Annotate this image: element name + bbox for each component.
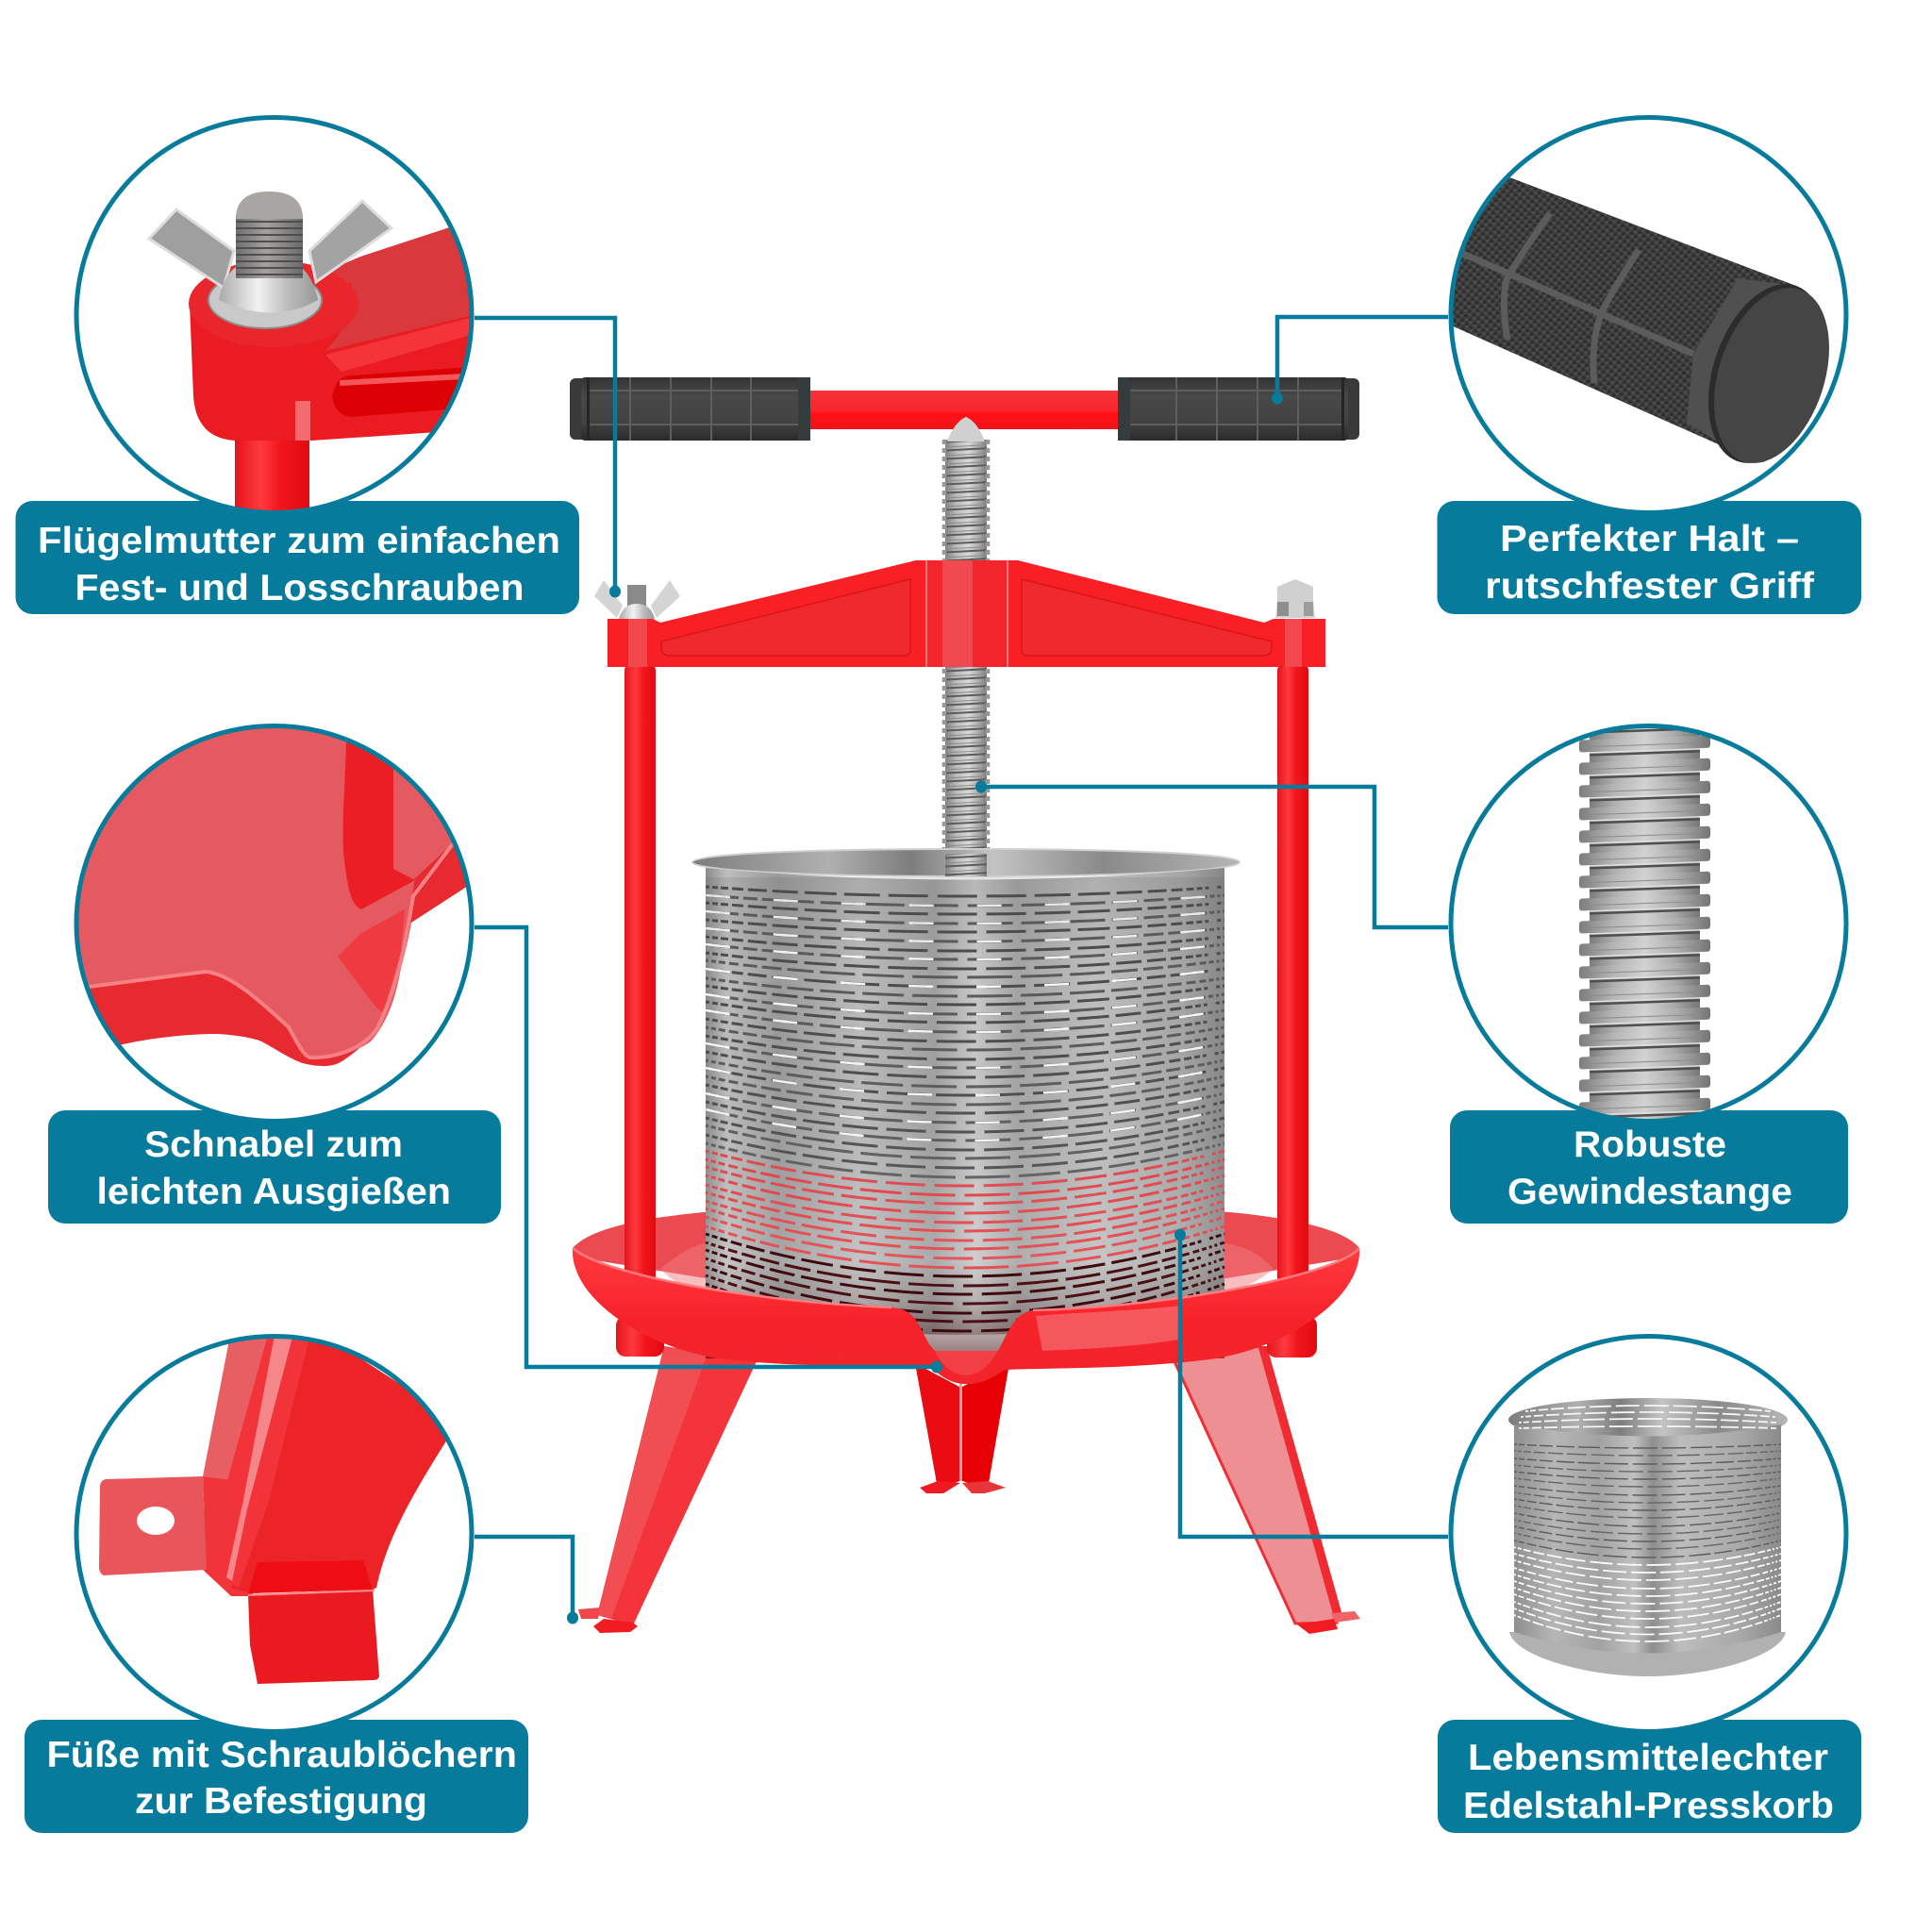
left grip xyxy=(570,377,810,441)
inset circle: wing nut xyxy=(76,117,481,519)
dark block xyxy=(248,1560,373,1593)
wing nut xyxy=(594,580,680,619)
label: threaded rod: Gewindestange xyxy=(1507,1172,1792,1212)
label: basket: Lebensmittelechter xyxy=(1468,1738,1828,1778)
outer wall xyxy=(90,846,466,1066)
label: feet xyxy=(25,1720,528,1833)
mini basket xyxy=(1508,1398,1788,1676)
panel: feet xyxy=(25,1330,528,1833)
screw hole xyxy=(137,1507,175,1535)
connector: threaded rod xyxy=(975,781,1448,927)
end cap xyxy=(1714,288,1829,463)
red post xyxy=(235,440,309,510)
label: threaded rod: Robuste xyxy=(1574,1124,1726,1165)
tray floor sheen xyxy=(660,1243,1274,1294)
highlight xyxy=(295,401,310,441)
left leg xyxy=(578,1346,758,1633)
tray front wall with spout xyxy=(573,1248,1359,1384)
rim highlight xyxy=(573,1248,1359,1310)
label: feet: Füße mit Schraublöchern xyxy=(47,1735,517,1775)
label: spout: leichten Ausgießen xyxy=(96,1172,451,1212)
connector: feet xyxy=(475,1537,578,1624)
label: threaded rod xyxy=(1450,1110,1848,1224)
inset circle: grip xyxy=(1415,117,1850,513)
bright slot flecks xyxy=(706,895,1224,1141)
label: spout: Schnabel zum xyxy=(144,1124,403,1165)
label: wing nut: Flügelmutter zum einfachen xyxy=(38,521,560,561)
label: wing nut xyxy=(15,501,579,614)
bottom flange xyxy=(1509,1632,1786,1676)
right recess xyxy=(1022,579,1272,656)
dark body slots xyxy=(1514,1444,1781,1557)
tray inner surface xyxy=(573,1204,1359,1321)
washer xyxy=(208,283,323,329)
bracket body xyxy=(190,283,481,441)
rim and interior xyxy=(1508,1398,1788,1441)
right grip xyxy=(1118,377,1359,441)
left recess xyxy=(661,579,910,656)
label: spout xyxy=(48,1110,501,1224)
grip ribs xyxy=(1443,213,1693,383)
connector: handle grip xyxy=(1272,317,1448,404)
frame posts xyxy=(625,665,1308,1283)
wall highlights xyxy=(1036,1306,1181,1351)
label: grip: Perfekter Halt – xyxy=(1500,519,1799,559)
textured arm xyxy=(325,227,470,351)
red slots xyxy=(706,1151,1224,1258)
label: grip xyxy=(1438,501,1861,614)
light side band xyxy=(203,1330,269,1479)
tray feet stubs xyxy=(616,1316,1317,1357)
spout floor xyxy=(935,1351,998,1375)
bolt xyxy=(236,215,303,278)
product: fruit press xyxy=(570,377,1360,1634)
upper crossbeam xyxy=(608,560,1325,667)
label: grip: rutschfester Griff xyxy=(1485,566,1815,607)
panel: grip xyxy=(1415,117,1861,614)
connector: spout xyxy=(475,927,942,1374)
tab fold xyxy=(203,1476,238,1594)
threaded rod upper xyxy=(944,417,988,875)
main surface xyxy=(79,728,452,1057)
label: basket: Edelstahl-Presskorb xyxy=(1463,1786,1834,1826)
press basket xyxy=(692,849,1240,1358)
post reflection xyxy=(343,741,415,909)
lower ridge xyxy=(325,318,470,372)
inset circle: basket xyxy=(1451,1336,1846,1732)
right leg xyxy=(1174,1346,1360,1634)
inset circle: threaded rod xyxy=(1451,722,1846,1127)
flap crease xyxy=(248,1591,375,1595)
centre hub xyxy=(926,560,1008,667)
panel: basket xyxy=(1438,1336,1861,1833)
rod tip xyxy=(947,417,985,441)
inset circle: feet xyxy=(76,1330,472,1732)
bottom flap xyxy=(248,1590,379,1684)
inset circle: spout xyxy=(57,717,491,1121)
right wing xyxy=(309,201,391,282)
body xyxy=(1514,1424,1781,1653)
label: wing nut: Fest- und Losschrauben xyxy=(75,568,525,608)
inner spout reflection xyxy=(338,909,405,1013)
rim highlight xyxy=(89,841,455,1058)
bright strip xyxy=(227,1339,308,1588)
centre leg xyxy=(915,1363,1009,1493)
label: basket xyxy=(1438,1720,1861,1833)
label: feet: zur Befestigung xyxy=(135,1781,427,1822)
groove xyxy=(1708,284,1811,463)
panel: wing nut xyxy=(15,117,579,614)
interior slots xyxy=(1519,1406,1777,1428)
white body slots xyxy=(1514,1547,1781,1641)
slot xyxy=(332,368,462,417)
grip body xyxy=(1453,177,1796,444)
end band xyxy=(1687,278,1783,462)
connector: wing nut xyxy=(475,318,621,598)
T-handle bar xyxy=(810,391,1118,429)
panel: threaded rod xyxy=(1450,722,1848,1224)
thread xyxy=(1579,722,1710,1127)
fold underlay xyxy=(198,1509,253,1596)
hex nut xyxy=(1275,579,1315,618)
dome xyxy=(219,266,318,313)
dark lower slots xyxy=(706,1234,1224,1331)
left wing xyxy=(149,209,234,288)
leg face xyxy=(231,1341,446,1593)
side tab xyxy=(99,1476,207,1575)
connector: basket xyxy=(1174,1228,1448,1537)
panel: spout xyxy=(48,717,501,1224)
mounting ring xyxy=(189,260,358,347)
upper slots xyxy=(706,887,1224,1168)
